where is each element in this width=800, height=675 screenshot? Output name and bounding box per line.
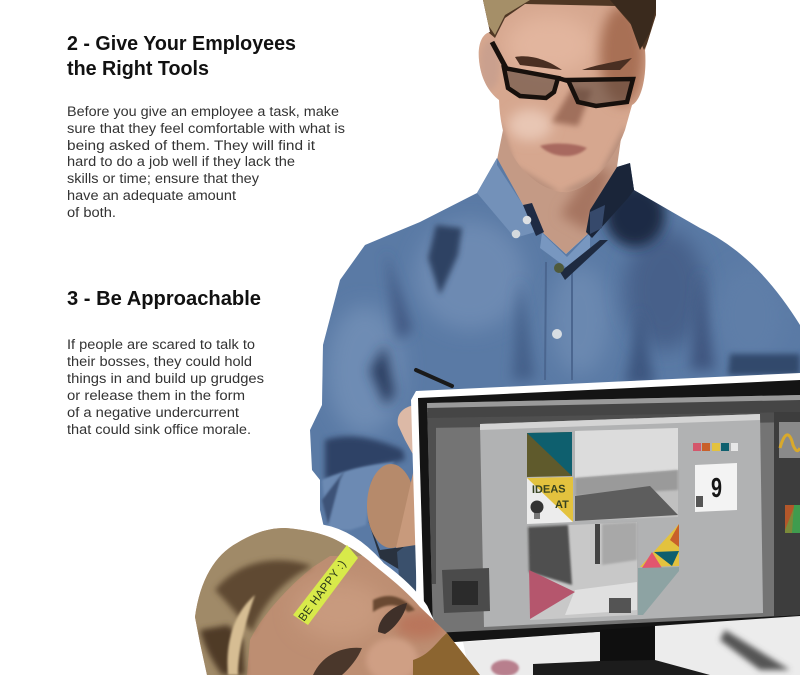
placket [545, 262, 572, 380]
text block: approachable paragraph [67, 337, 264, 437]
number card [695, 463, 737, 512]
stand [600, 626, 655, 675]
mustache [413, 633, 480, 675]
text block: approachable paragraph: or release them in the form [67, 388, 245, 403]
text block: right tools paragraph: hard to do a job well if they lack the [67, 154, 295, 169]
heading: 2 - Give Your Employees the Right Tools: 2 - Give Your Employees [67, 32, 296, 55]
collar right [586, 163, 634, 238]
monitor white frame [411, 373, 800, 642]
shirt [300, 150, 800, 600]
toolbar [428, 426, 436, 584]
desk [463, 632, 600, 675]
lower sleeve shadow [368, 520, 404, 569]
text block: approachable paragraph: their bosses, they could hold [67, 354, 252, 369]
forearm and hand [367, 464, 415, 548]
canvas [480, 414, 763, 627]
text block: approachable paragraph: that could sink office morale. [67, 422, 251, 437]
heading: 2 - Give Your Employees the Right Tools [67, 32, 296, 80]
buttons [523, 216, 531, 224]
screen: 9 [711, 472, 722, 503]
icon: glasses [492, 42, 633, 106]
neck [497, 110, 625, 254]
monitor bezel [418, 380, 800, 642]
artboard: woman photo [528, 522, 637, 620]
artboard: teal and dots [527, 432, 572, 477]
text block: approachable paragraph: If people are scared to talk to [67, 337, 255, 352]
text block: right tools paragraph: Before you give an employee a task, make [67, 104, 339, 119]
skin [190, 525, 490, 675]
collar left [477, 158, 542, 238]
eyebrows [515, 56, 562, 70]
photo: smiling man with sticker [190, 525, 490, 675]
screen [420, 390, 800, 640]
artboard: geometric tile [640, 524, 679, 567]
text block: right tools paragraph [67, 104, 345, 220]
face [478, 0, 656, 192]
heading: 2 - Give Your Employees the Right Tools: the Right Tools [67, 57, 209, 80]
text block: right tools paragraph: have an adequate amount [67, 188, 236, 203]
hair [480, 0, 660, 50]
icon: sticker [293, 545, 358, 625]
text block: approachable paragraph: things in and build up grudges [67, 371, 264, 386]
photo: monitor [411, 373, 800, 675]
screen: AT [555, 499, 569, 511]
eyes and brows [373, 596, 415, 612]
text block: right tools paragraph: of both. [67, 205, 116, 220]
photo: man with glasses [300, 0, 800, 600]
text block: right tools paragraph: being asked of them. They will find it [67, 138, 315, 153]
artboard: ideas tile [527, 477, 573, 524]
icon: sticker: BE HAPPY :) [297, 558, 349, 624]
pen [416, 370, 452, 386]
nose [366, 638, 418, 675]
artboard: road photo [575, 470, 678, 520]
text block: approachable paragraph: of a negative undercurrent [67, 405, 239, 420]
right panels [774, 412, 800, 617]
hair [190, 525, 362, 675]
sleeve folds [325, 436, 405, 480]
swatches [693, 443, 738, 451]
heading: 3 - Be Approachable: 3 - Be Approachable [67, 287, 261, 310]
white outline [322, 527, 432, 622]
text block: right tools paragraph: skills or time; ensure that they [67, 171, 259, 186]
floating panel [442, 568, 490, 613]
text block: right tools paragraph: sure that they feel comfortable with what is [67, 121, 345, 136]
screen: IDEAS [532, 483, 566, 496]
inner shirt [540, 233, 590, 268]
